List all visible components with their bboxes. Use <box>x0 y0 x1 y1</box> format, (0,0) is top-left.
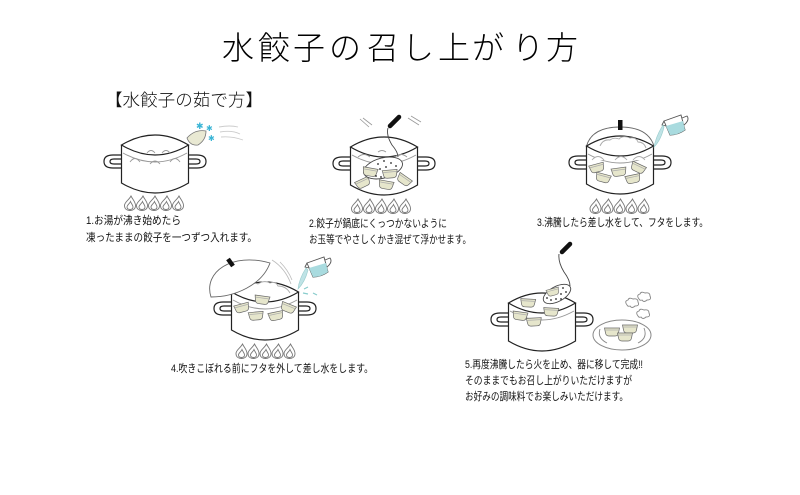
step 1 text <box>86 213 257 244</box>
title: が <box>472 30 504 66</box>
step 5 text: お好みの調味料でお楽しみいただけます。 <box>465 389 628 403</box>
title: 上 <box>438 30 470 66</box>
heading: how to boil: 【水餃子の茹で方】 <box>105 91 263 110</box>
step 2 illustration <box>333 116 435 214</box>
icon: pitcher pouring water <box>654 115 688 147</box>
step 3 illustration <box>569 115 688 214</box>
step 2 text: お玉等でやさしくかき混ぜて浮かせます。 <box>309 232 471 246</box>
pot lid, lifted <box>210 259 292 297</box>
step 2 text: 2.餃子が鍋底にくっつかないように <box>309 216 447 230</box>
step 2 text <box>309 216 471 246</box>
step 5 text: 5.再度沸騰したら火を止め、器に移して完成!! <box>465 357 643 371</box>
icon: pitcher pouring water <box>298 257 331 295</box>
icon: frozen dumpling: ✱ <box>206 124 213 133</box>
title: 召 <box>367 30 399 66</box>
title: し <box>402 30 434 66</box>
step 1 text: 1.お湯が沸き始めたら <box>86 213 181 227</box>
title: の <box>329 30 361 66</box>
icon: frozen dumpling: ✱ <box>196 121 204 131</box>
icon: frozen dumpling: ✱ <box>208 134 215 143</box>
pot lid <box>586 120 654 146</box>
step 3 text: 3.沸騰したら差し水をして、フタをします。 <box>537 215 708 229</box>
icon: ladle <box>361 117 405 183</box>
title: り <box>512 30 544 66</box>
icon: ladle <box>540 244 574 308</box>
title: 方 <box>546 30 578 66</box>
step 5 text <box>465 357 643 403</box>
step 5 illustration <box>491 244 651 351</box>
icon: steam <box>626 292 651 318</box>
step 1 illustration <box>104 121 243 210</box>
step 1 text: 凍ったままの餃子を一つずつ入れます。 <box>86 231 257 244</box>
step 4 illustration <box>210 257 331 358</box>
title: 水 <box>222 30 254 66</box>
plate with dumplings <box>593 320 651 350</box>
step 4 text: 4.吹きこぼれる前にフタを外して差し水をします。 <box>171 361 373 375</box>
icon: frozen dumpling <box>187 121 243 145</box>
title: 子 <box>293 30 325 66</box>
title <box>222 30 578 66</box>
title: 餃 <box>258 30 290 66</box>
step 5 text: そのままでもお召し上がりいただけますが <box>465 373 632 387</box>
